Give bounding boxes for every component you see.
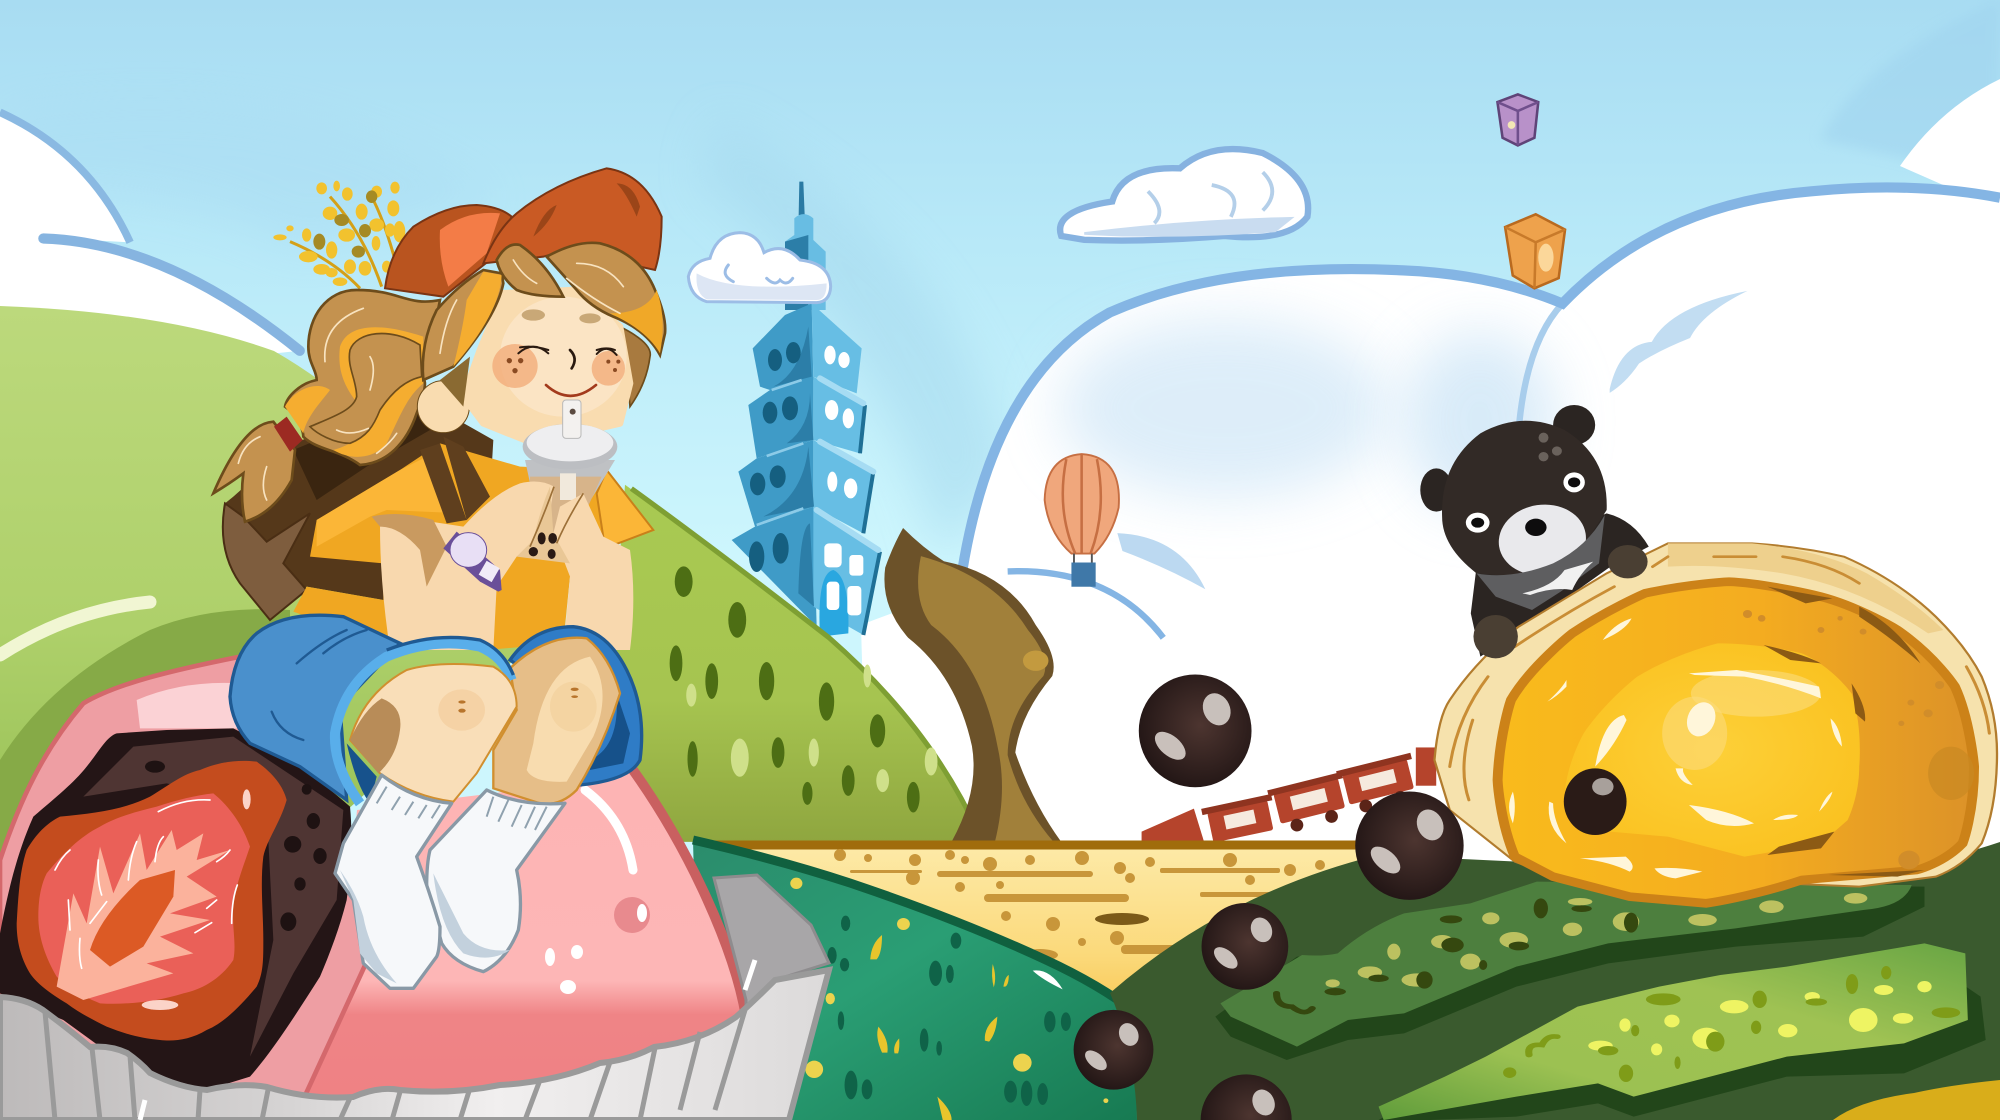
strawberry: [17, 761, 287, 1041]
tier 3: [738, 440, 813, 527]
girl: wavy hair: [238, 290, 440, 500]
girl: left shorts cuff: [335, 643, 512, 803]
left green hill: [0, 306, 536, 893]
green hill with trees: [599, 485, 982, 842]
Taipei 101 tower: [732, 182, 880, 637]
hot air balloon: [1045, 454, 1119, 587]
sky lantern purple: [1497, 94, 1538, 145]
matcha roll lower: [1379, 943, 1986, 1120]
bear: [1420, 405, 1649, 657]
train: [1142, 747, 1436, 844]
tier 4: [732, 507, 817, 627]
girl: ear: [417, 381, 469, 433]
queen's head rock: [884, 528, 1061, 842]
girl: left sock: [335, 775, 452, 988]
big white cloud hills right: [957, 187, 2000, 893]
cloud beside tower: [688, 233, 831, 303]
girl: hair tie: [274, 417, 303, 452]
boba pearls: [1074, 674, 1464, 1120]
small cloud mark on hill: [1610, 291, 1747, 393]
girl: right leg: [493, 638, 620, 804]
corner yellow pastry: [1833, 1080, 2000, 1120]
dark green hill right: [1110, 842, 2000, 1120]
girl: left leg: [350, 664, 517, 802]
egg yolk pastry: [1434, 543, 1997, 903]
tier 2: [748, 377, 813, 458]
emerald hill bottom center: [693, 840, 1137, 1120]
girl: face: [463, 290, 630, 443]
girl: arms and hands: [372, 481, 633, 650]
girl: right shorts cuff: [510, 627, 642, 785]
sky lantern orange: [1505, 214, 1565, 288]
cloud upper right: [1060, 149, 1308, 241]
girl: left shorts: [230, 615, 400, 800]
white hills top left: [0, 112, 300, 383]
mochi left lobe: [0, 657, 377, 1107]
mochi with strawberry: [0, 657, 746, 1110]
highlight stroke on left hill: [0, 602, 150, 655]
girl: right sock: [427, 790, 565, 972]
mochi right lobe: [250, 770, 746, 1110]
darker green band around mochi: [0, 609, 290, 880]
girl: shirt: [293, 437, 653, 650]
small white hill with balloon: [861, 533, 1205, 842]
girl: hair dark side: [620, 327, 650, 407]
girl: fringe: [423, 243, 665, 407]
tier 1: [753, 303, 813, 390]
sand biscuit ground: [700, 845, 1400, 1030]
matcha roll upper: [1215, 882, 1924, 1060]
cupcake liner: [0, 875, 829, 1120]
girl: bubble tea cup: [523, 400, 617, 560]
girl: [213, 168, 665, 988]
white hill top right corner: [1900, 79, 2000, 210]
girl: watch: [443, 532, 502, 592]
girl: backpack: [223, 397, 493, 620]
girl: ponytail: [213, 422, 295, 522]
girl: wheat sprig: [273, 181, 405, 288]
girl: hat: [385, 168, 662, 297]
bear paws: [1608, 545, 1648, 578]
